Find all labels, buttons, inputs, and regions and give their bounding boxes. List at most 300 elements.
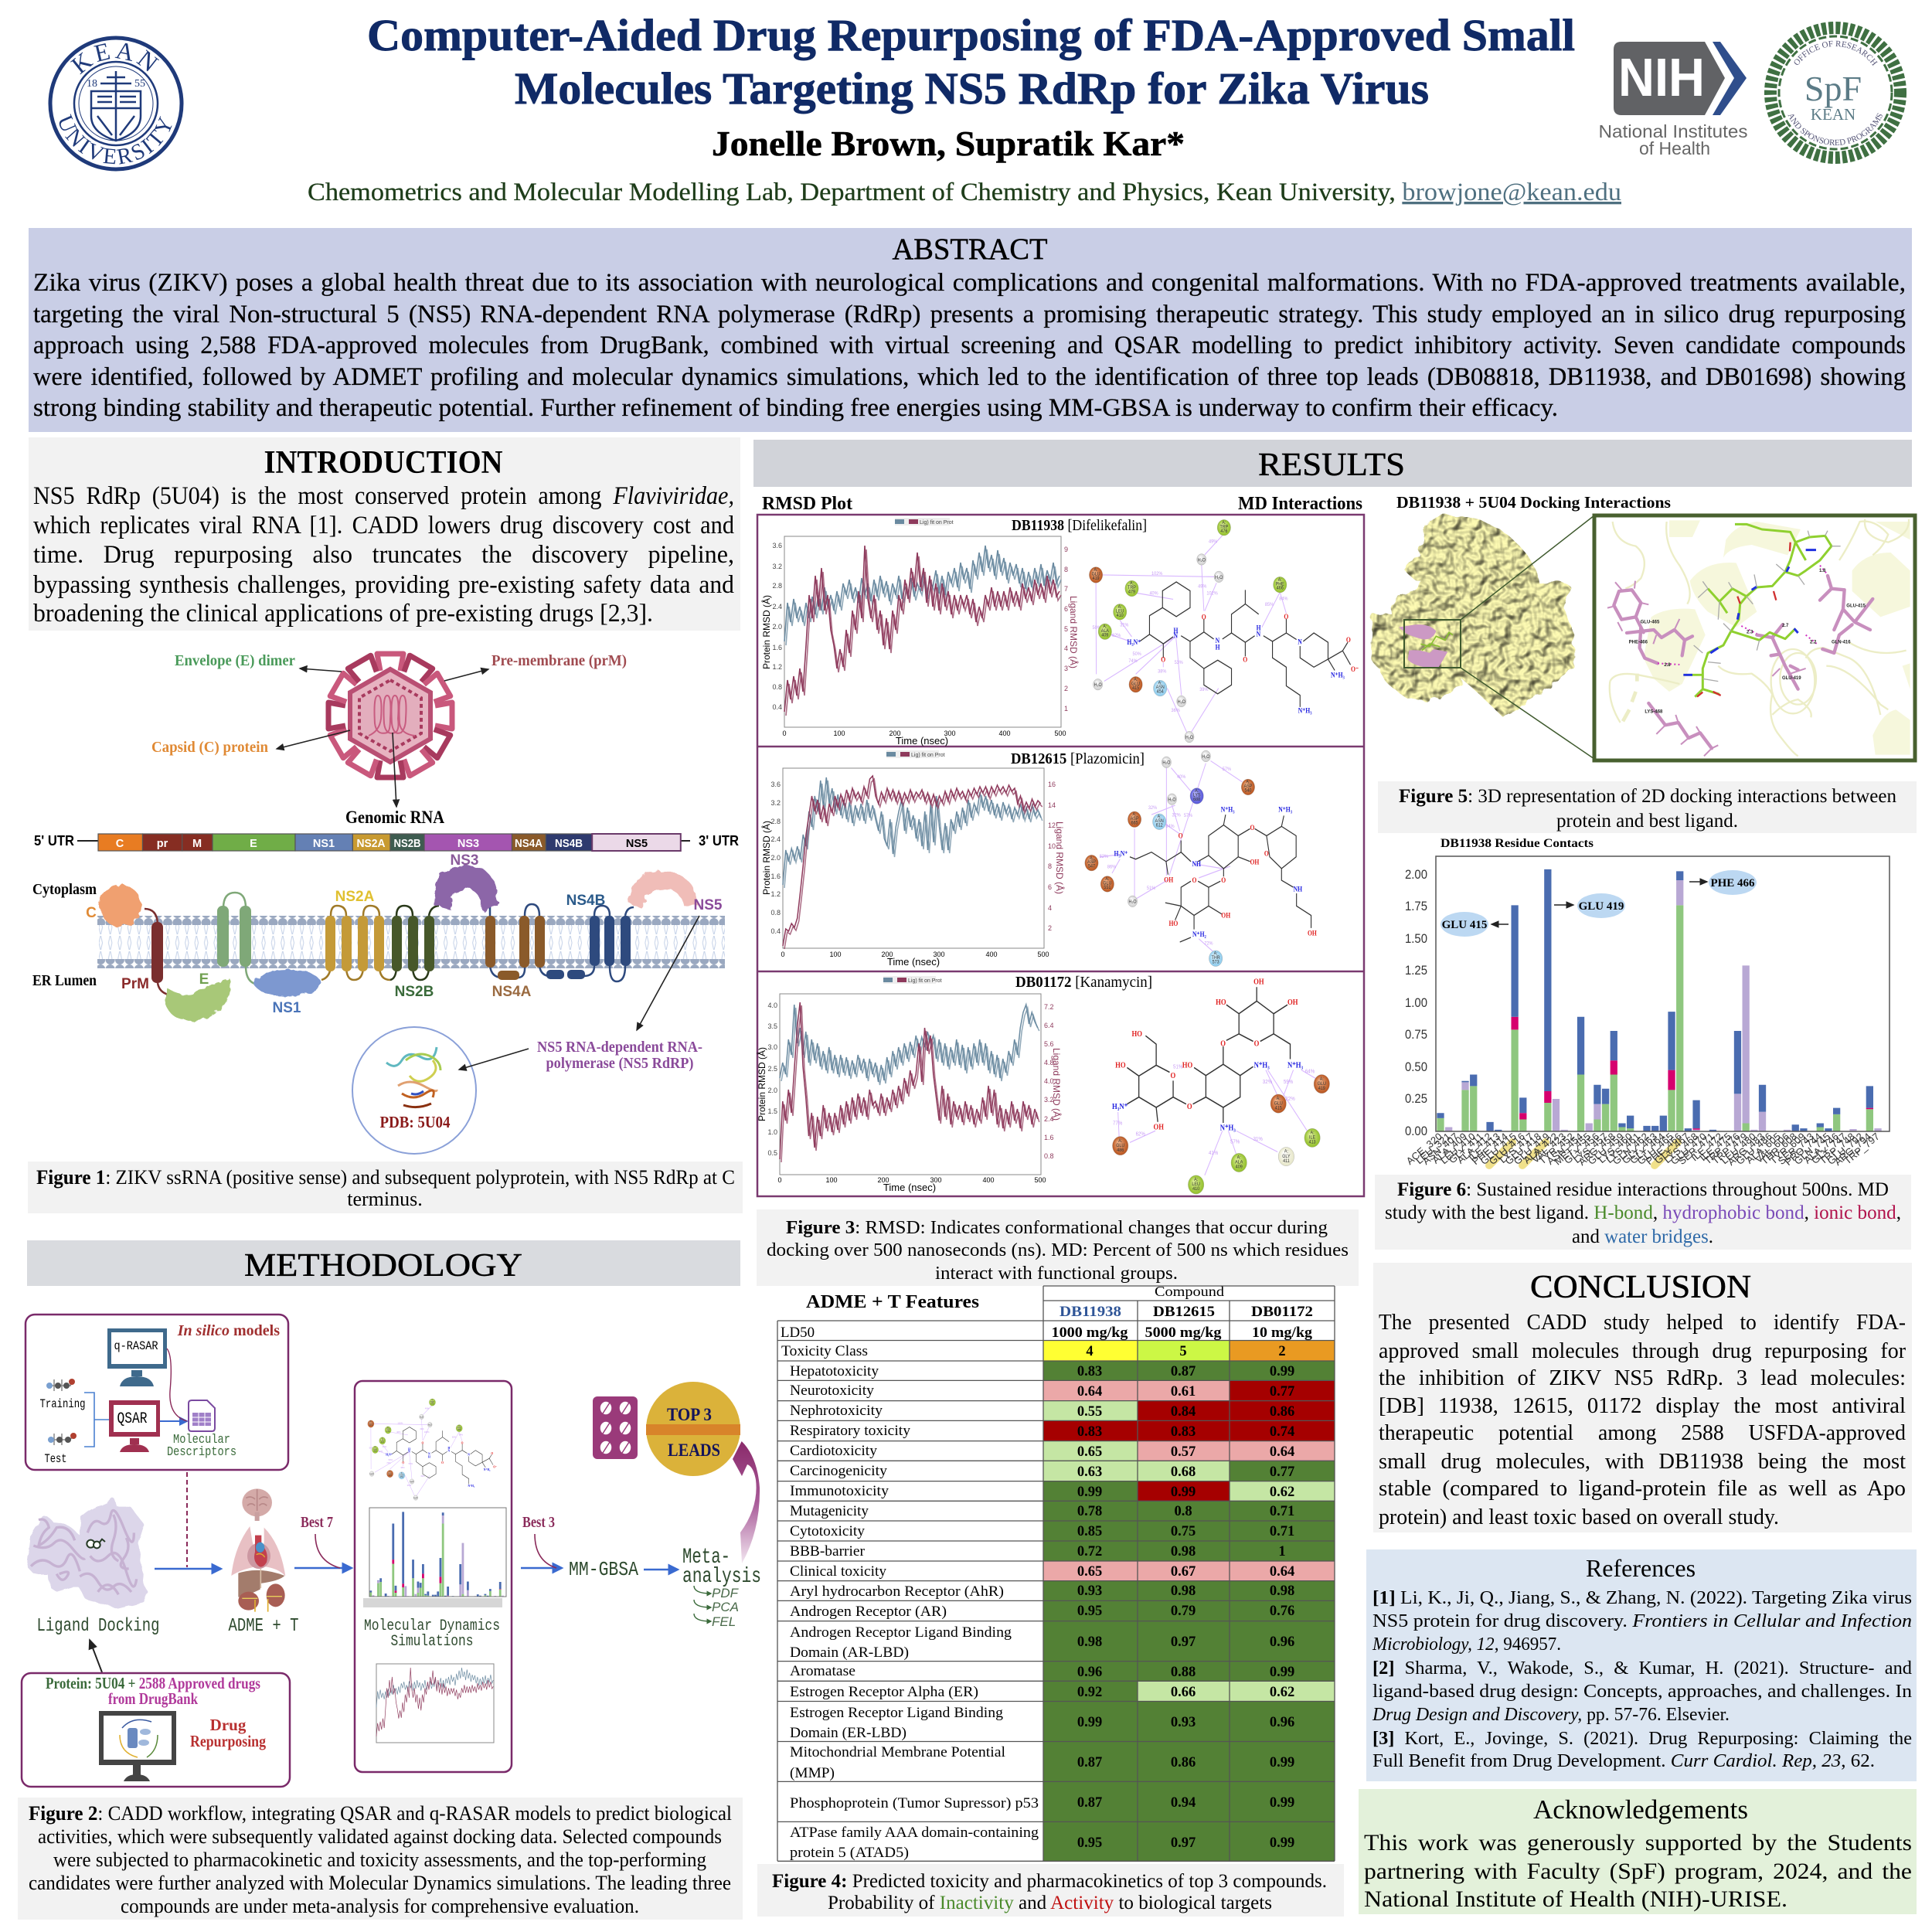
2D interaction diagram DB01172: O (1220, 1040, 1226, 1049)
2D interaction diagram DB11938: H (1174, 627, 1179, 634)
RMSD plot 2: 10 (1048, 842, 1056, 850)
2D interaction diagram DB01172: 22% (1285, 1096, 1295, 1102)
molecular descriptors icon: Descriptors (167, 1445, 236, 1460)
polyprotein bar: NS4B (555, 838, 583, 850)
RMSD plot 3: 1.6 (1044, 1134, 1054, 1141)
table row labels: Domain (AR-LBD) (790, 1645, 909, 1661)
2D interaction diagram DB12615: HO (1168, 920, 1179, 927)
table row labels: Cytotoxicity (790, 1523, 866, 1539)
x axis residue labels: GLY_747 (1809, 1131, 1849, 1166)
RMSD plot 2: Time (nsec) (887, 956, 940, 968)
2D interaction diagram DB12615: 57% (1184, 813, 1193, 818)
RMSD plot 2: 2.0 (770, 854, 781, 862)
icon: pill pack (593, 1396, 638, 1459)
2D interaction diagram DB12615: GLU (1103, 881, 1111, 886)
x axis residue labels: ILE_413 (1466, 1131, 1502, 1163)
table values: 0.95 (1077, 1835, 1102, 1851)
2D interaction diagram DB11938: 476 (1220, 529, 1228, 534)
2D interaction diagram DB11938: 31% (1120, 622, 1129, 628)
residue labels (1629, 569, 1866, 715)
RMSD plot 3: 4.8 (1044, 1059, 1054, 1066)
compound titles: DB11938 [Difelikefalin] (1012, 517, 1147, 534)
table values: 0.62 (1270, 1485, 1294, 1500)
best 7 label (301, 1514, 340, 1568)
2D interaction diagram DB12615: NH (1192, 860, 1201, 868)
methodology header: METHODOLOGY (244, 1248, 522, 1284)
y axis ticks: 2.00 (1405, 867, 1427, 882)
2D interaction diagram DB12615: A: (1214, 951, 1218, 957)
RMSD plot 2: 4 (1048, 904, 1052, 912)
table header: Compound (1155, 1284, 1224, 1299)
2D interaction diagram DB01172: 415 (1275, 1106, 1282, 1111)
x axis residue labels: ALA_409 (1430, 1131, 1469, 1166)
figure 5: docking interactions (1370, 493, 1915, 760)
RMSD plot 3: 2.4 (1044, 1115, 1054, 1123)
title (367, 10, 1575, 114)
2D interaction diagram DB12615: OH (1250, 859, 1260, 866)
x axis residue labels: LEU_480 (1719, 1131, 1758, 1166)
2D interaction diagram DB01172: N⁺H₃ (1254, 1062, 1270, 1070)
RMSD plot 3: 0.8 (1044, 1152, 1054, 1160)
x axis residue labels: ARG_458 (1577, 1131, 1617, 1168)
2D interaction diagram DB01172: N⁺H₃ (1220, 1124, 1236, 1133)
RMSD plot 1: 5 (1064, 625, 1068, 633)
panel: acknowledgements (1359, 1789, 1917, 1914)
RMSD plot 3: 6.4 (1044, 1022, 1054, 1029)
RMSD plot 3: 3.2 (1044, 1096, 1054, 1104)
MM-GBSA: MM-GBSA (569, 1558, 638, 1581)
logo: NIH: National Institutes (1598, 121, 1748, 141)
table values: 0.8 (1174, 1504, 1192, 1519)
2D interaction diagram DB01172: 64% (1305, 1069, 1315, 1075)
2D interaction diagram DB11938: GLU (1131, 682, 1140, 687)
2D interaction diagram DB11938: 36% (1171, 707, 1180, 713)
conclusion text (1379, 1310, 1906, 1529)
figure 3: RMSD plots and MD interactions: RMSD Plot (762, 494, 852, 514)
2D interaction diagram DB12615: A: (1158, 815, 1162, 820)
RMSD plot 3: 1.0 (767, 1128, 777, 1136)
RMSD plot 3: 0.5 (767, 1149, 777, 1157)
table values: 0.99 (1270, 1755, 1294, 1770)
table values: 0.99 (1270, 1835, 1294, 1851)
table values: 10 mg/kg (1252, 1325, 1313, 1341)
RMSD plot 1: 2.0 (772, 623, 782, 631)
polyprotein bar: NS1 (313, 838, 335, 850)
NS5 RdRp label: NS5 RNA-dependent RNA- (537, 1039, 702, 1056)
x axis residue labels: THR_608 (1759, 1131, 1799, 1167)
table values: 0.96 (1270, 1634, 1294, 1650)
RMSD plot 2: 2 (1048, 924, 1052, 932)
introduction text: bypassing synthesis challenges, providing pre-existing safety data and (33, 571, 734, 599)
panel: in silico models: In silico models (177, 1322, 280, 1339)
table row labels: ATPase family AAA domain-containing (790, 1825, 1039, 1841)
RMSD plot 2: 6 (1048, 883, 1052, 891)
figure 4 caption: Probability of Inactivity and Activity to biological targets (828, 1893, 1272, 1913)
2D interaction diagram DB11938: N (1257, 631, 1260, 638)
x axis residue labels: PHE_414 (1470, 1131, 1510, 1167)
2D interaction diagram DB11938: 53% (1175, 660, 1183, 665)
x axis residue labels: LYS_461 (1604, 1131, 1642, 1165)
RMSD plot 1: 0 (782, 730, 787, 737)
conclusion text: [DB] 11938, 12615, 01172 display the most antiviral (1379, 1393, 1906, 1418)
table values: 0.64 (1270, 1564, 1294, 1580)
RMSD plot 2: 12 (1048, 821, 1056, 829)
2D interaction diagram DB11938: O (1243, 656, 1248, 664)
2D interaction diagram DB01172: N⁺H₃ (1287, 1062, 1303, 1070)
2D interaction diagram DB12615: 688 (1193, 798, 1201, 802)
affiliation: Chemometrics and Molecular Modelling Lab, Department of Chemistry and Physics, Kean University, browjone@kean.edu (308, 179, 1621, 206)
RMSD plot 2: 16 (1048, 781, 1056, 788)
2D interaction diagram DB12615: N⁺H₃ (1221, 806, 1235, 814)
virus particle (328, 654, 452, 777)
x axis residue labels: ALA_412 (1454, 1131, 1494, 1166)
x axis residue labels: GLU_465 (1635, 1131, 1675, 1167)
membrane with proteins: NS2A (335, 889, 375, 905)
monitor icon (99, 1711, 176, 1781)
abstract text (33, 269, 1906, 422)
RMSD plot 3: 7.2 (1044, 1003, 1054, 1011)
2D interaction diagram DB11938: A: (1103, 624, 1107, 630)
abstract text: targeting the viral Non-structural 5 (NS5) RNA-dependent RNA polymerase (RdRp) presents a promising therapeutic strategy. This study employed an in silico drug repurposing (33, 301, 1906, 328)
RMSD plot 2: 2.4 (770, 835, 781, 843)
RMSD plot 2: 0.8 (770, 909, 781, 917)
2D interaction diagram DB12615: H₂O (1168, 798, 1176, 803)
top 3 leads pill: TOP 3 (667, 1405, 712, 1424)
RMSD plot 2: 400 (985, 951, 998, 958)
callout: PHE 466: PHE 466 (1710, 877, 1755, 889)
2D interaction diagram DB01172: 413 (1309, 1140, 1316, 1145)
mini bar chart (363, 1508, 506, 1607)
x axis residue labels: GLY_456 (1562, 1131, 1601, 1166)
2D interaction diagram DB01172: 419 (1318, 1087, 1325, 1091)
x axis residue labels: ACE_320 (1404, 1131, 1444, 1167)
logo: NIH: NIH (1618, 47, 1705, 107)
x axis residue labels: GLN_745 (1792, 1131, 1832, 1167)
2D interaction diagram DB12615: 86% (1107, 864, 1117, 869)
protein surface (1370, 515, 1574, 716)
RMSD plot 2: 14 (1048, 801, 1056, 809)
residue labels: GLN-416 (1832, 641, 1851, 645)
panel: references (1366, 1549, 1917, 1781)
RMSD plot 3: Protein RMSD (Å) (756, 1047, 767, 1121)
2D interaction diagram DB12615: 32% (1148, 805, 1158, 811)
table row labels: Mutagenicity (790, 1503, 869, 1519)
PDB protein circle: PDB: 5U04 (380, 1113, 451, 1131)
table row labels: Androgen Receptor Ligand Binding (790, 1624, 1012, 1641)
residue labels: 2.8 (1664, 663, 1671, 668)
2D interaction diagram DB12615: 40% (1177, 774, 1186, 780)
2D interaction diagram DB12615: 612 (1156, 823, 1163, 828)
abstract text: approach using 2,588 FDA-approved molecules from DrugBank, combined with virtual screening and QSAR modelling to predict inhibitory activity. Seven candidate compounds (33, 332, 1906, 359)
x axis residue labels: LYS_457 (1571, 1131, 1610, 1165)
panel: molecular dynamics simulations: Molecular Dynamics (364, 1617, 500, 1635)
x axis residue labels: TRP_479 (1709, 1131, 1750, 1167)
2D interaction diagram DB11938: 40% (1149, 590, 1158, 597)
2D interaction diagram DB01172: A: (1194, 1178, 1198, 1182)
callout: PHE 466 (1689, 870, 1757, 895)
x axis residue labels: GLU_792 (1825, 1131, 1866, 1167)
callout: GLU 419 (1554, 893, 1625, 918)
2D interaction diagram DB01172: A: (1284, 1149, 1288, 1155)
table values: 2 (1278, 1344, 1286, 1359)
y axis ticks: 1.50 (1405, 931, 1427, 946)
2D interaction diagram DB01172: 62% (1136, 1131, 1145, 1137)
2D interaction diagram DB11938: 50% (1093, 625, 1101, 631)
2D interaction diagram DB11938: H₂O (1215, 575, 1223, 580)
2D interaction diagram DB12615: 551 (1104, 886, 1111, 890)
table values: 0.66 (1171, 1685, 1196, 1700)
RMSD plot 1: 1.2 (772, 663, 782, 671)
RMSD plot 1: 1.6 (772, 644, 782, 651)
x axis residue labels: ALA_422 (1521, 1131, 1560, 1166)
table values: 0.99 (1270, 1795, 1294, 1811)
RMSD plot 2: 1.6 (770, 872, 781, 880)
2D interaction diagram DB12615: 573 (1213, 960, 1219, 964)
membrane with proteins: Cytoplasm (32, 881, 97, 898)
2D interaction diagram DB01172: GLU (1274, 1101, 1283, 1106)
2D interaction diagram DB11938: N⁺H₃ (1331, 672, 1345, 679)
figure 6 caption: Figure 6: Sustained residue interactions throughout 500ns. MD (1397, 1179, 1889, 1200)
2D interaction diagram DB11938: 38% (1158, 668, 1167, 675)
2D interaction diagram DB11938: N (1174, 632, 1178, 640)
table values: 0.98 (1171, 1583, 1196, 1599)
2D interaction diagram DB01172: ALA (1235, 1160, 1243, 1165)
2D interaction diagram DB12615: ASP (1087, 860, 1096, 865)
figure 6 caption (1375, 1175, 1911, 1250)
RMSD plot 1: Protein RMSD (Å) (760, 595, 772, 669)
2D interaction diagram DB01172: HO (1131, 1030, 1142, 1039)
mini molecule (368, 1398, 497, 1500)
QSAR monitor (109, 1400, 160, 1452)
figure 2 caption: were subjected to pharmacokinetic and toxicity assessments, and the top-performing (53, 1849, 706, 1871)
RMSD plot 3: 200 (877, 1176, 889, 1184)
RMSD plot 3: 2.0 (767, 1087, 777, 1094)
table values: 0.92 (1077, 1685, 1102, 1700)
references list: Drug Design and Discovery, pp. 57-76. Elsevier. (1372, 1705, 1730, 1725)
x axis residue labels: SER_471 (1676, 1131, 1716, 1167)
2D interaction diagram DB11938: O (1161, 656, 1166, 664)
panel: drug repurposing (22, 1673, 290, 1787)
2D interaction diagram DB12615: A: (1105, 877, 1109, 882)
RMSD plot 3: 2.5 (767, 1065, 777, 1073)
table values (1051, 1325, 1313, 1851)
y axis ticks: 1.00 (1405, 995, 1427, 1010)
RMSD plot 3: 3.0 (767, 1043, 777, 1051)
conclusion text: protein) and least toxic based on overall study. (1379, 1505, 1779, 1529)
RMSD plot 1: 7 (1064, 585, 1068, 593)
table values: 0.97 (1171, 1835, 1196, 1851)
best 3 label: Best 3 (522, 1514, 555, 1531)
references heading: References (1586, 1554, 1696, 1582)
abstract text: Zika virus (ZIKV) poses a global health threat due to its association with neurological complications and congenital malformations. With no FDA-approved treatments available, (33, 269, 1906, 297)
references list: Full Benefit from Drug Development. Curr Cardiol. Rep, 23 , 62. (1372, 1751, 1875, 1771)
2D interaction diagram DB12615: H₂O (1162, 760, 1171, 766)
RMSD plot 3: 5.6 (1044, 1040, 1054, 1048)
2D interaction diagram DB01172: 486 (1117, 1148, 1124, 1153)
table values: 0.67 (1171, 1564, 1196, 1580)
virus labels and arrows: Genomic RNA (345, 808, 444, 827)
2D interaction diagram DB12615: NH (1294, 886, 1302, 893)
RMSD plot 2: Ligand RMSD (Å) (1054, 821, 1066, 894)
introduction text: broadening the clinical applications of pre-existing drugs [2,3]. (33, 600, 653, 628)
table row labels: Immunotoxicity (790, 1483, 889, 1499)
2D interaction diagram DB11938: 62% (1112, 633, 1121, 638)
logo: SpF Kean: OFFICE OF RESEARCH (1794, 40, 1878, 66)
x axis residue labels: GLY_463 (1620, 1131, 1659, 1166)
figure 5 caption: protein and best ligand. (1556, 811, 1738, 832)
2D interaction diagram DB12615: N⁺H₃ (1278, 806, 1292, 814)
2D interaction diagram DB01172: GLY (1282, 1154, 1291, 1159)
training and test molecules: Test (45, 1452, 66, 1466)
RMSD plot 1: 500 (1054, 730, 1066, 737)
green ligand sticks (1686, 524, 1832, 697)
table: ADME + T features (777, 1284, 1335, 1862)
table row labels: Phosphoprotein (Tumor Supressor) p53 (790, 1795, 1039, 1811)
table values: 0.86 (1270, 1404, 1294, 1420)
table values: 0.68 (1171, 1464, 1196, 1480)
acknowledgements heading: Acknowledgements (1533, 1794, 1748, 1825)
2D interaction diagram DB12615: ASP (1244, 784, 1252, 789)
table values: 0.99 (1077, 1715, 1102, 1730)
table header (806, 1284, 1313, 1320)
virus labels and arrows: Envelope (E) dimer (175, 652, 295, 669)
panel frame (757, 515, 1364, 1196)
table row labels: Respiratory toxicity (790, 1423, 911, 1439)
x axis residue labels: TYR_609 (1767, 1131, 1808, 1167)
logo: SpF Kean: SpF (1804, 69, 1862, 108)
table values: 5 (1179, 1344, 1187, 1359)
RMSD plot 1: Time (nsec) (896, 735, 948, 747)
table values: 0.99 (1270, 1665, 1294, 1680)
table values: 0.83 (1171, 1424, 1196, 1440)
table values: 0.74 (1270, 1424, 1294, 1440)
membrane with proteins: NS3 (451, 852, 478, 869)
RMSD plot 1: 2.4 (772, 603, 782, 611)
RMSD plot 3: 500 (1034, 1176, 1046, 1184)
callout: GLU 415: GLU 415 (1442, 919, 1487, 931)
x axis residue labels: LYS_417 (1497, 1131, 1536, 1165)
virus labels and arrows (151, 652, 627, 827)
q-RASAR monitor (107, 1328, 167, 1386)
logo: SpF Kean: KEAN (1811, 105, 1855, 124)
x axis residue labels: ALA_605 (1743, 1131, 1783, 1166)
compound titles: DB12615 [Plazomicin] (1011, 750, 1145, 767)
conclusion text: The presented CADD study helped to identify FDA- (1379, 1310, 1906, 1335)
table values: 0.93 (1171, 1715, 1196, 1730)
table values: 0.65 (1077, 1564, 1102, 1580)
2D interaction diagram DB01172: O (1254, 1040, 1259, 1049)
panel: in silico models (26, 1315, 288, 1470)
2D interaction diagram DB01172: A: (1237, 1155, 1241, 1161)
bars (1437, 869, 1882, 1131)
RMSD plot 3: 4.0 (1044, 1077, 1054, 1085)
residue labels: GLU-415 (1846, 604, 1866, 608)
RMSD plot 1 (760, 518, 1080, 747)
2D interaction diagram DB11938: ASN (1156, 685, 1165, 690)
2D interaction diagram DB01172: 409 (1236, 1165, 1243, 1170)
2D interaction diagram DB11938 (1089, 519, 1359, 743)
table row labels: Estrogen Receptor Ligand Binding (790, 1705, 1004, 1721)
figure 5 caption: Figure 5: 3D representation of 2D docking interactions between (1399, 786, 1896, 807)
2D interaction diagram DB11938: 409 (1101, 633, 1108, 638)
figure 3: RMSD plots and MD interactions: MD Interactions (1238, 494, 1362, 514)
RMSD plot 1: 8 (1064, 566, 1068, 573)
table values: 0.83 (1077, 1364, 1102, 1379)
x axis residue labels: GLU_459 (1586, 1131, 1626, 1167)
molecular descriptors icon (167, 1400, 236, 1460)
pale protein ribbons (1610, 519, 1910, 756)
2D interaction diagram DB11938: 74% (1128, 658, 1138, 664)
2D interaction diagram DB12615: LYS (1193, 793, 1201, 798)
table row labels: protein 5 (ATAD5) (790, 1845, 909, 1861)
table values: 1 (1278, 1544, 1286, 1560)
table row labels: Aromatase (790, 1663, 855, 1679)
figure 6: residue contacts bar chart (1404, 837, 1889, 1168)
RMSD plot 3: Ligand RMSD (Å) (1051, 1048, 1063, 1121)
table row labels: Aryl hydrocarbon Receptor (AhR) (790, 1583, 1004, 1600)
2D interaction diagram DB12615: ASP (1131, 817, 1138, 821)
table values: 0.87 (1077, 1795, 1102, 1811)
2D interaction diagram DB11938: N⁺H₃ (1298, 707, 1312, 715)
curved arrow to top leads (733, 1441, 760, 1563)
abstract text: were identified, followed by ADMET profiling and molecular dynamics simulations, which led to the identification of three top leads (DB08818, DB11938, and DB01698) showing (33, 363, 1906, 391)
figure 2 caption (18, 1798, 743, 1920)
logo: Kean University seal: UNIVERSITY (59, 114, 172, 165)
table values: 0.77 (1270, 1384, 1294, 1400)
x axis residue labels: TRP_797 (1842, 1131, 1882, 1167)
2D interaction diagram DB12615: O (1192, 876, 1197, 884)
RMSD plot 3: Lig) fit on Prot (908, 978, 942, 984)
2D interaction diagram DB12615: THR (1212, 956, 1220, 961)
x axis residue labels: LYS_460 (1596, 1131, 1634, 1165)
2D interaction diagram DB11938: TRP (1128, 586, 1136, 590)
conclusion text: approved small molecules through drug repurposing for (1379, 1338, 1906, 1363)
figure 2 caption: compounds are under meta-analysis for comprehensive evaluation. (121, 1895, 639, 1917)
x axis residue labels: GLN_462 (1611, 1131, 1651, 1167)
2D interaction diagram DB12615: 72% (1204, 940, 1213, 947)
references list: [2] Sharma, V., Wakode, S., & Kumar, H. (2021). Structure- and (1372, 1658, 1912, 1679)
x axis residue labels: GLY_467 (1652, 1131, 1692, 1166)
table values: 0.98 (1171, 1544, 1196, 1560)
highlighted residues (1489, 1142, 1678, 1165)
logo: Kean University seal: 55 (134, 78, 145, 90)
2D interaction diagram DB12615: OH (1221, 912, 1231, 920)
2D interaction diagram DB11938: 102% (1206, 590, 1218, 597)
references list: [1] Li, K., Ji, Q., Jiang, S., & Zhang, N. (2022). Targeting Zika virus (1372, 1588, 1912, 1608)
table values: 0.99 (1270, 1364, 1294, 1379)
figure 3 caption: docking over 500 nanoseconds (ns). MD: Percent of 500 ns which residues (767, 1240, 1349, 1260)
panel: molecular dynamics simulations: Simulations (391, 1633, 473, 1651)
2D interaction diagram DB11938: H (1216, 644, 1220, 651)
2D interaction diagram DB11938: A: (1158, 681, 1162, 686)
table values: 0.86 (1171, 1755, 1196, 1770)
x axis residue labels (1404, 1131, 1882, 1168)
RMSD plot 3 (756, 976, 1063, 1193)
table header: DB01172 (1251, 1304, 1313, 1320)
table values: 0.64 (1077, 1384, 1102, 1400)
x axis residue labels: VAL_423 (1529, 1131, 1568, 1165)
residue labels: GLU-419 (1782, 676, 1801, 681)
y axis ticks (1405, 867, 1427, 1138)
2D interaction diagram DB01172: 59% (1284, 1080, 1293, 1085)
meta-analysis: Meta- (682, 1546, 730, 1570)
RMSD plot 1: Ligand RMSD (Å) (1068, 596, 1080, 668)
RMSD plot 1: 3.6 (772, 542, 782, 549)
RMSD plot 3: 300 (930, 1176, 942, 1184)
meta-analysis: PDF (712, 1586, 740, 1600)
RMSD plot 2: 2.8 (770, 818, 781, 825)
polyprotein bar: 5' UTR (34, 833, 74, 849)
